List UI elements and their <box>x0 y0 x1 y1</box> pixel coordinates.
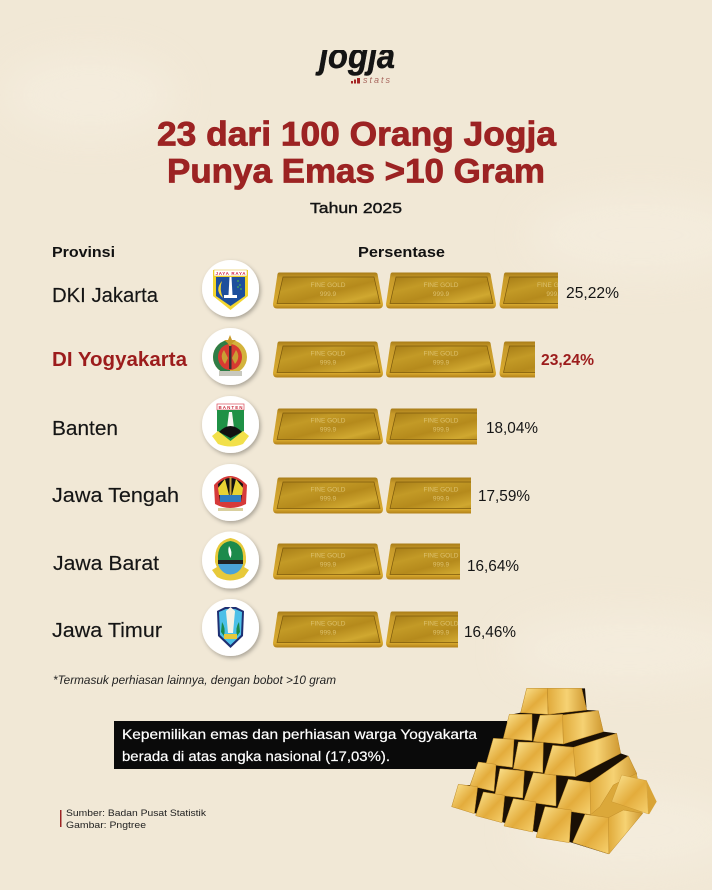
row: Jawa Timur: 16,46% <box>464 624 516 641</box>
row: DKI Jakarta: FINE GOLD <box>423 282 459 289</box>
row: Banten: FINE GOLD <box>310 418 346 424</box>
title: Punya Emas >10 Gram <box>167 152 545 190</box>
row: DI Yogyakarta: FINE GOLD <box>310 350 346 358</box>
row: DKI Jakarta <box>52 260 619 317</box>
source credit: Sumber: Badan Pusat Statistik <box>66 808 206 819</box>
subtitle: Tahun 2025 <box>310 200 402 217</box>
row: Jawa Tengah: 999.9 <box>433 496 450 502</box>
row: DI Yogyakarta: 999.9 <box>433 360 450 366</box>
row: Jawa Timur: Jawa Timur <box>52 619 162 642</box>
row: Jawa Timur: FINE GOLD <box>310 620 346 628</box>
source credit <box>60 808 206 831</box>
row: DKI Jakarta: 999.9 <box>320 291 337 298</box>
callout: berada di atas angka nasional (17,03%). <box>122 749 390 764</box>
logo <box>315 50 394 84</box>
row: DKI Jakarta: DKI Jakarta <box>52 284 159 307</box>
row: DKI Jakarta: FINE GOLD <box>310 282 346 289</box>
row: DI Yogyakarta <box>52 328 610 385</box>
row: DKI Jakarta: JAYA RAYA <box>216 271 246 276</box>
column heading: provinsi: Provinsi <box>52 244 115 261</box>
row: Jawa Barat: 16,64% <box>467 558 519 575</box>
icon: gold bar pyramid <box>452 688 657 854</box>
row: Banten: FINE GOLD <box>423 418 459 424</box>
row: Banten: BANTEN <box>218 405 242 410</box>
row: DI Yogyakarta: FINE GOLD <box>423 350 459 358</box>
row: Jawa Tengah: 999.9 <box>320 496 337 502</box>
column heading: persentase: Persentase <box>358 244 445 261</box>
row: DI Yogyakarta: DI Yogyakarta <box>52 348 188 371</box>
title <box>157 116 557 190</box>
row: Jawa Timur <box>52 599 516 656</box>
row: Jawa Barat <box>53 532 519 588</box>
row: DKI Jakarta: FINE GOLD <box>537 282 572 289</box>
source credit: Gambar: Pngtree <box>66 820 146 831</box>
footnote: *Termasuk perhiasan lainnya, dengan bobot >10 gram <box>53 675 336 687</box>
row: Banten: Banten <box>52 417 118 440</box>
row: Banten: 18,04% <box>486 420 538 437</box>
row: Banten: 999.9 <box>433 426 450 434</box>
row: Jawa Barat: 999.9 <box>320 562 337 568</box>
row: Banten: 999.9 <box>320 426 337 434</box>
row: Jawa Tengah: Jawa Tengah <box>52 484 179 507</box>
row: Jawa Tengah <box>52 464 530 521</box>
logo: stats <box>363 75 390 85</box>
row: Jawa Barat: 999.9 <box>433 562 450 568</box>
callout: Kepemilikan emas dan perhiasan warga Yogyakarta <box>122 727 478 742</box>
row: Jawa Barat: Jawa Barat <box>53 552 159 575</box>
row: DKI Jakarta: 999.9 <box>546 291 563 298</box>
row: Jawa Timur: 999.9 <box>433 630 450 636</box>
logo: jogja <box>315 37 395 76</box>
row: DI Yogyakarta: 23,24% <box>541 352 594 369</box>
row: DKI Jakarta: 999.9 <box>433 291 450 298</box>
row: Jawa Barat: FINE GOLD <box>423 552 459 560</box>
row: Jawa Barat: FINE GOLD <box>310 552 346 560</box>
row: DKI Jakarta: 25,22% <box>566 285 619 302</box>
callout <box>114 721 507 769</box>
title: 23 dari 100 Orang Jogja <box>157 116 557 154</box>
row: Jawa Timur: FINE GOLD <box>423 620 459 628</box>
row: DI Yogyakarta: 999.9 <box>320 360 337 366</box>
row: Jawa Tengah: FINE GOLD <box>423 486 459 494</box>
row: Jawa Tengah: 17,59% <box>478 488 530 505</box>
row: Jawa Timur: 999.9 <box>320 630 337 636</box>
row: Banten <box>52 396 538 453</box>
row: Jawa Tengah: FINE GOLD <box>310 486 346 494</box>
